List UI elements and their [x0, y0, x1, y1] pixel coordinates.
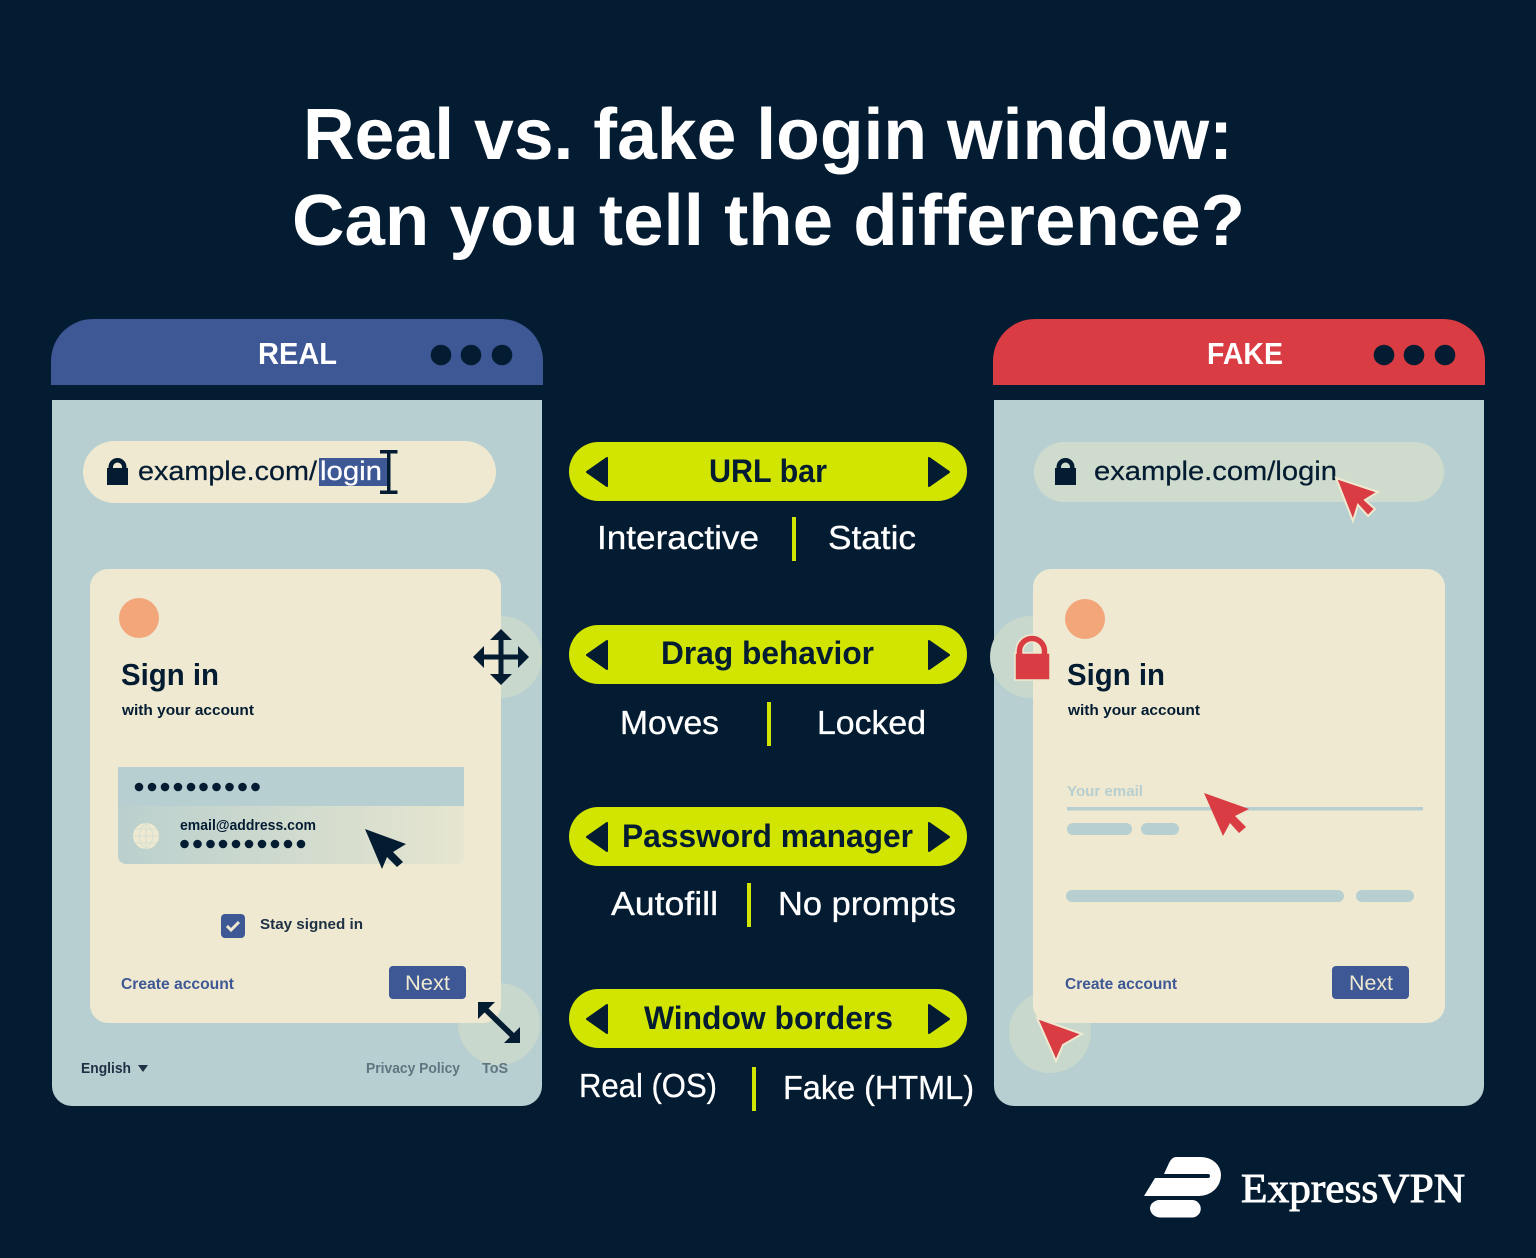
placeholder bars [1066, 890, 1414, 902]
row: Window borders [569, 989, 974, 1111]
footer: links: Privacy Policy [366, 1061, 460, 1077]
real login card [90, 569, 501, 1023]
password manager autofill suggestion [118, 806, 464, 864]
real login card: Sign in [121, 657, 219, 692]
fake window header [993, 319, 1485, 385]
icon: ExpressVPN mark [1144, 1157, 1221, 1218]
fake URL bar [1034, 442, 1444, 502]
icon: red cursor on URL bar [1336, 478, 1378, 521]
row: Password manager: Autofill [611, 885, 718, 922]
create account link: Create account [121, 976, 234, 993]
password field [118, 767, 464, 806]
real login card: with your account [121, 702, 254, 719]
icon: globe [133, 823, 159, 849]
panel: real window [51, 319, 543, 1106]
row: URL bar: URL bar [709, 453, 827, 489]
row: Drag behavior: Locked [817, 704, 926, 741]
row: Password manager: No prompts [778, 885, 956, 922]
email placeholder field: Your email [1067, 783, 1143, 800]
real window header [51, 319, 543, 385]
icon: real cursor on autofill [365, 829, 406, 869]
row: Window borders: Real (OS) [579, 1067, 717, 1104]
row: Window borders: Window borders [644, 1000, 893, 1036]
real URL bar: login [320, 456, 382, 486]
password manager autofill suggestion: email@address.com [180, 818, 316, 834]
footer: links [366, 1061, 508, 1077]
real URL bar [83, 441, 496, 503]
row: URL bar: Interactive [597, 519, 759, 556]
row: Window borders: Fake (HTML) [783, 1069, 974, 1106]
create account link: Create account [1065, 976, 1177, 993]
icon: red cursor on email field [1204, 793, 1249, 836]
title: Real vs. fake login window: [303, 95, 1233, 175]
icon: resize arrow [478, 1002, 520, 1043]
title [292, 95, 1245, 261]
email placeholder field [1067, 783, 1423, 835]
panel: fake window [990, 319, 1485, 1106]
icon: move arrows [473, 629, 529, 685]
panel: comparison list [569, 442, 974, 1111]
icon: red corner pointer [1037, 1018, 1082, 1061]
row: URL bar [569, 442, 967, 561]
fake login card: Sign in [1067, 657, 1165, 692]
fake URL bar: example.com/login [1094, 456, 1337, 486]
move handle circle [460, 616, 542, 698]
footer: language selector: English [81, 1061, 131, 1077]
logo: ExpressVPN [1144, 1157, 1465, 1218]
row: Drag behavior [569, 625, 967, 746]
row: URL bar: Static [828, 519, 916, 556]
resize handle circle [458, 983, 540, 1065]
fake login card [1033, 569, 1445, 1023]
logo: ExpressVPN: ExpressVPN [1241, 1165, 1465, 1211]
row: Drag behavior: Drag behavior [661, 635, 874, 671]
next button [1332, 966, 1409, 999]
row: Drag behavior: Moves [620, 704, 719, 741]
fake login card: with your account [1067, 702, 1200, 719]
title: Can you tell the difference? [292, 181, 1245, 261]
real window header: REAL [258, 336, 337, 371]
icon: red padlock [1015, 635, 1050, 680]
real window body [52, 400, 542, 1106]
locked handle circle [990, 616, 1072, 698]
real URL bar: example.com/ [138, 456, 318, 486]
stay signed in checkbox: Stay signed in [260, 916, 363, 933]
fake window body [994, 400, 1484, 1106]
next button: Next [1349, 971, 1393, 995]
footer: links: ToS [482, 1061, 508, 1077]
next button: Next [405, 971, 450, 995]
next button [389, 966, 466, 999]
corner handle circle [1009, 991, 1091, 1073]
row: Password manager [569, 807, 967, 927]
stay signed in checkbox [221, 914, 363, 938]
fake window header: FAKE [1207, 336, 1283, 371]
row: Password manager: Password manager [622, 818, 913, 854]
